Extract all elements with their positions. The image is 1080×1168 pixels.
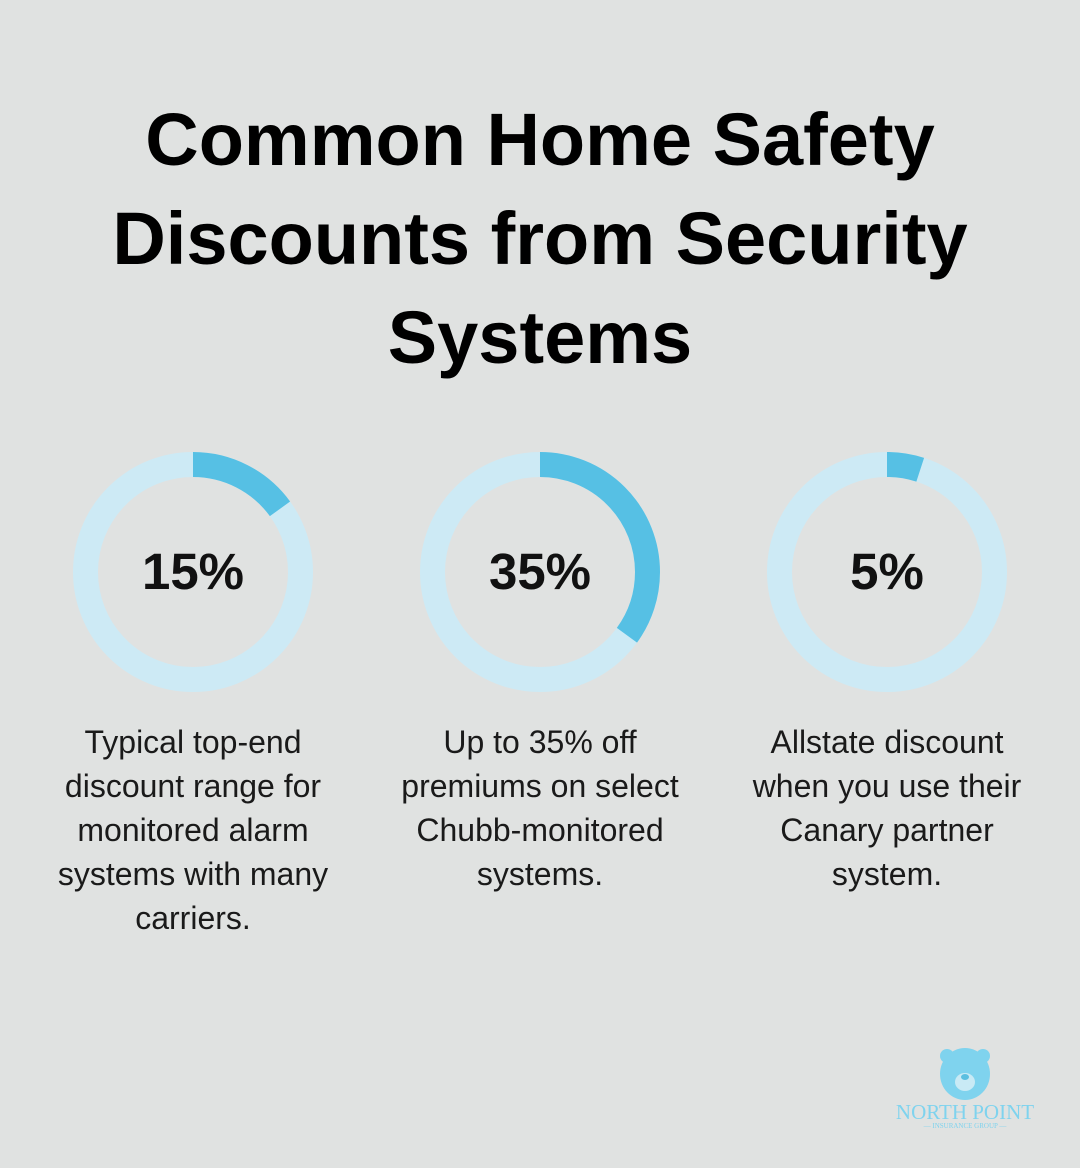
donut chart 35% [420, 452, 660, 692]
description: discount range for [65, 768, 321, 804]
donut chart 35%: 35% [489, 543, 591, 600]
panel: 35% [401, 452, 679, 892]
panel: 5% [752, 452, 1021, 892]
description: system. [832, 856, 942, 892]
donut chart 5%: 5% [850, 543, 924, 600]
description: Allstate discount [770, 724, 1004, 760]
description: carriers. [135, 900, 251, 936]
logo [896, 1048, 1034, 1130]
donut chart 5% [767, 452, 1007, 692]
description [752, 724, 1021, 892]
title: Common Home Safety [145, 98, 935, 181]
description: systems with many [58, 856, 328, 892]
description: Up to 35% off [443, 724, 637, 760]
description: Typical top-end [84, 724, 302, 760]
description: monitored alarm [77, 812, 309, 848]
title [112, 98, 968, 379]
description: premiums on select [401, 768, 679, 804]
description: Canary partner [780, 812, 994, 848]
donut chart 15%: 15% [142, 543, 244, 600]
description: systems. [477, 856, 603, 892]
donut chart 15% [73, 452, 313, 692]
description [401, 724, 679, 892]
icon: bear [940, 1048, 990, 1100]
title: Systems [388, 296, 692, 379]
logo: NORTH POINT [896, 1100, 1034, 1124]
panel: 15% [58, 452, 328, 936]
description: when you use their [753, 768, 1021, 804]
description: Chubb-monitored [416, 812, 664, 848]
title: Discounts from Security [112, 197, 968, 280]
description [58, 724, 328, 936]
logo: — INSURANCE GROUP — [924, 1122, 1006, 1130]
